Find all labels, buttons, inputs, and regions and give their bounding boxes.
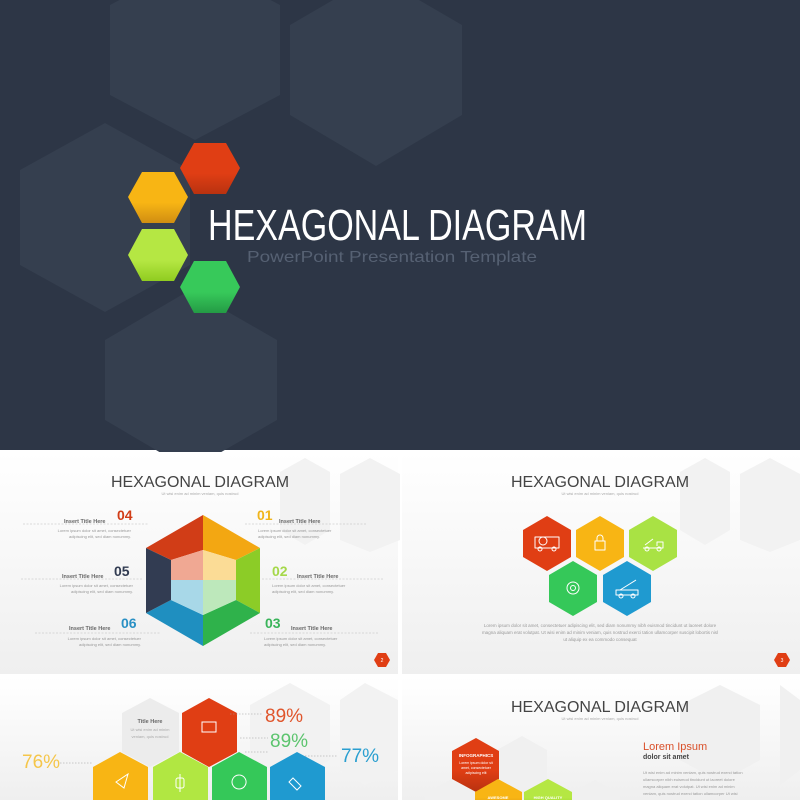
heading: HEXAGONAL DIAGRAM	[111, 474, 289, 491]
icon hexagons	[523, 516, 677, 616]
page number: 2	[381, 658, 384, 664]
panel: slide 2 cube diagram: Lorem ipsum dolor sit amet, consectetuer	[264, 636, 338, 641]
text block: ullamcorper nibh euismod tincidunt ut laoreet dolore	[643, 777, 736, 782]
title: HEXAGONAL DIAGRAM	[208, 201, 587, 250]
text block: veniam, quis nostrud exerci tation ullamcorper Ut wisi	[643, 791, 738, 796]
hexagons: INFOGRAPHICS	[459, 753, 493, 758]
panel: slide 2 cube diagram: adipiscing elit, sed diam nonummy.	[264, 642, 326, 647]
text block: Lorem ipsum dolor sit amet, consectetuer adipiscing elit, sed diam nonummy nibh euismod tincidunt ut laoreet dolore	[484, 623, 717, 628]
text block: Lorem Ipsum	[643, 741, 707, 753]
heading: HEXAGONAL DIAGRAM	[511, 699, 689, 716]
page number: 3	[781, 658, 784, 664]
page number	[774, 653, 790, 667]
percentage labels	[22, 706, 379, 773]
chart: cube hexagon	[146, 515, 260, 646]
panel: slide 2 cube diagram: Insert Title Here	[297, 574, 338, 580]
hexagons: veniam, quis nostrud	[132, 734, 168, 739]
text block	[643, 741, 743, 796]
text block	[482, 623, 718, 642]
panel: slide 2 cube diagram: Lorem ipsum dolor sit amet, consectetuer	[60, 583, 134, 588]
panel: hero slide	[0, 0, 800, 470]
percentage labels: 89%	[265, 706, 303, 727]
callouts: 01	[257, 507, 273, 523]
callouts	[114, 507, 288, 631]
panel: slide 2 cube diagram: Insert Title Here	[291, 626, 332, 632]
hexagons	[452, 738, 572, 800]
heading: HEXAGONAL DIAGRAM	[511, 474, 689, 491]
panel: slide 2 cube diagram: Ut wisi enim ad minim veniam, quis nostrud	[162, 491, 238, 496]
callouts: 06	[121, 615, 137, 631]
panel: slide 2 cube diagram	[0, 452, 400, 674]
panel: slide 2 cube diagram: Lorem ipsum dolor sit amet, consectetuer	[258, 528, 332, 533]
hexagons: amet, consectetuer	[461, 766, 492, 770]
hexagons: Ut wisi enim ad minim	[131, 727, 170, 732]
text block: magna aliquam erat volutpat. Ut wisi enim ad minim veniam, quis nostrud exerci tation ullamcorper suscipit lobortis nisl	[482, 630, 718, 635]
text block: magna aliquam erat volutpat. Ut wisi enim ad minim	[643, 784, 735, 789]
panel: slide 2 cube diagram: Insert Title Here	[279, 519, 320, 525]
text block: Ut wisi enim ad minim veniam, quis nostrud exerci tation	[643, 770, 743, 775]
callouts: 02	[272, 563, 288, 579]
subtitle: PowerPoint Presentation Template	[247, 249, 537, 266]
page number	[374, 653, 390, 667]
panel: slide 2 cube diagram: Insert Title Here	[62, 574, 103, 580]
panel: slide 2 cube diagram: adipiscing elit, sed diam nonummy.	[272, 589, 334, 594]
icon: hexagon cluster	[128, 143, 240, 313]
panel: slide 2 cube diagram: adipiscing elit, sed diam nonummy.	[71, 589, 133, 594]
panel: slide 2 cube diagram: Lorem ipsum dolor sit amet, consectetuer	[68, 636, 142, 641]
panel: slide 3 icon hexagons	[402, 452, 800, 674]
panel: slide 2 cube diagram: Insert Title Here	[64, 519, 105, 525]
callouts: 05	[114, 563, 130, 579]
panel: slide 2 cube diagram: adipiscing elit, sed diam nonummy.	[258, 534, 320, 539]
panel: slide 4 percentages	[0, 677, 398, 800]
hexagons: HIGH QUALITY	[534, 795, 563, 800]
percentage labels: 89%	[270, 731, 308, 752]
panel: slide 2 cube diagram: Insert Title Here	[69, 626, 110, 632]
percentage labels: 76%	[22, 752, 60, 773]
hexagons: Lorem ipsum dolor sit	[459, 761, 493, 765]
text block: ut aliquip ex ea commodo consequat	[563, 637, 637, 642]
panel: slide 2 cube diagram: adipiscing elit, sed diam nonummy.	[79, 642, 141, 647]
text block: dolor sit amet	[643, 754, 690, 761]
panel: slide 2 cube diagram: adipiscing elit, sed diam nonummy.	[69, 534, 131, 539]
percentage labels: 77%	[341, 746, 379, 767]
hexagons: AWESOME	[488, 795, 509, 800]
hexagons: Title Here	[138, 719, 162, 725]
hexagons	[93, 698, 325, 800]
panel: slide 2 cube diagram: Lorem ipsum dolor sit amet, consectetuer	[58, 528, 132, 533]
hexagons: adipiscing elit	[465, 771, 487, 775]
panel: slide 5	[402, 677, 800, 800]
panel: slide 2 cube diagram: Lorem ipsum dolor sit amet, consectetuer	[272, 583, 346, 588]
panel: slide 3 icon hexagons: Ut wisi enim ad minim veniam, quis nostrud	[562, 491, 638, 496]
panel: slide 5: Ut wisi enim ad minim veniam, quis nostrud	[562, 716, 638, 721]
callouts: 04	[117, 507, 133, 523]
callouts: 03	[265, 615, 281, 631]
